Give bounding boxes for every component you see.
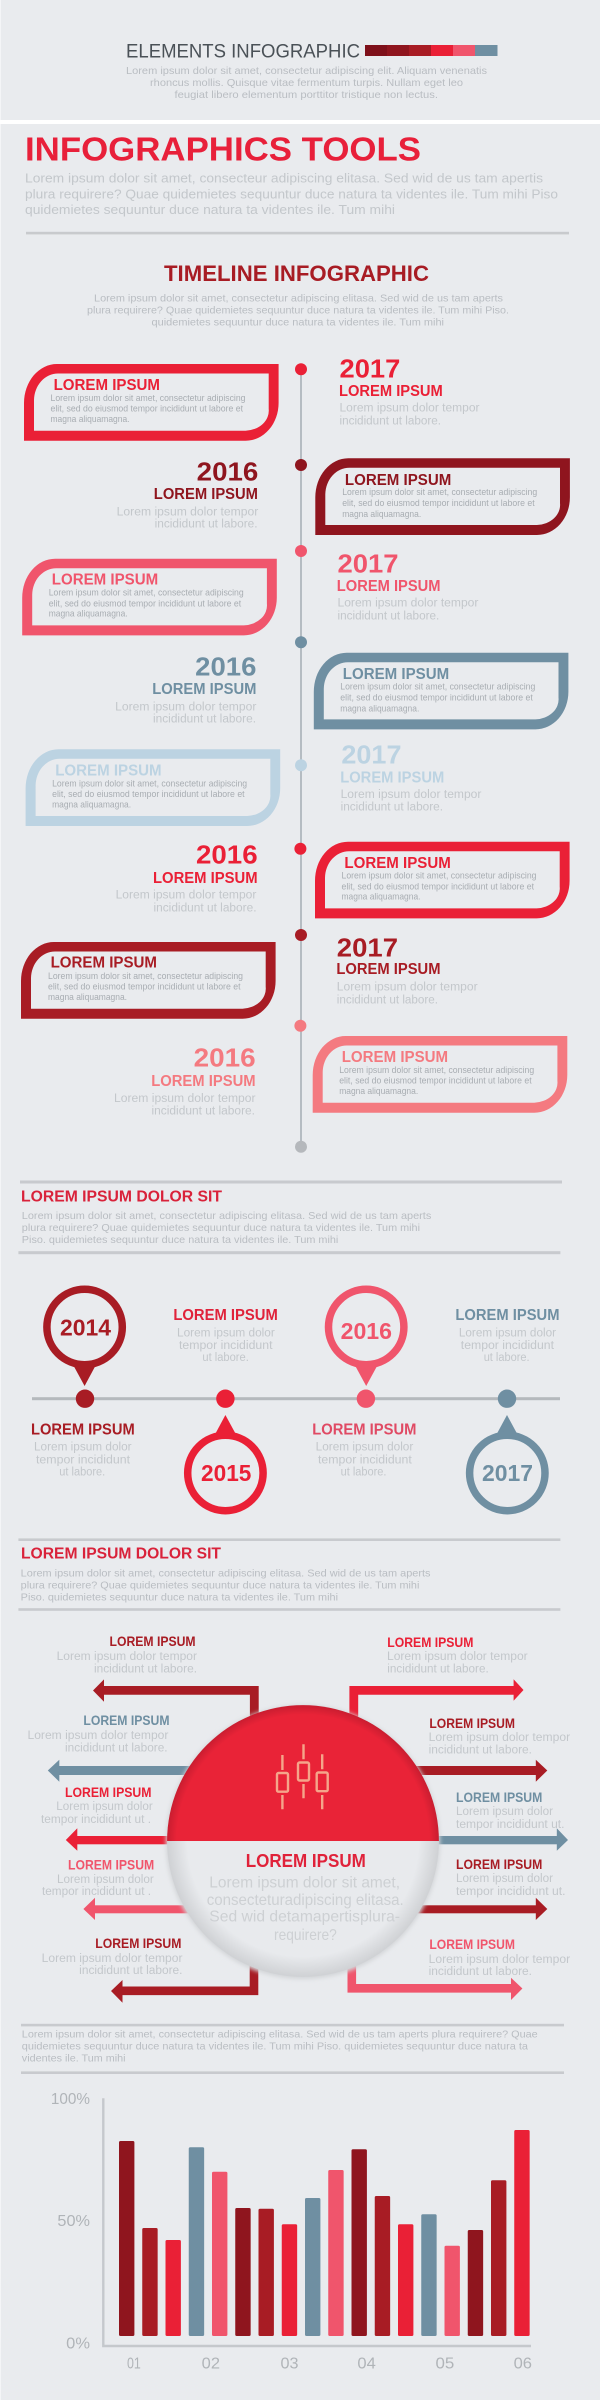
main title: INFOGRAPHICS TOOLS (25, 132, 421, 169)
pin label top middle (173, 1307, 278, 1364)
main paragraph: Lorem ipsum dolor sit amet, consecteur adipiscing elitasa. Sed wid de us tam apertis (25, 171, 544, 186)
timeline year 2017 b: LOREM IPSUM (337, 578, 440, 595)
timeline year 2017 b: Lorem ipsum dolor tempor (338, 598, 479, 610)
timeline card 8 (313, 1036, 567, 1113)
timeline card 8: magna aliquamagna. (339, 1086, 418, 1097)
pin label top right: LOREM IPSUM (455, 1307, 560, 1324)
timeline card 1: elit, sed do eiusmod tempor incididunt ut labore et (50, 404, 243, 415)
timeline year 2016 c: 2016 (196, 842, 258, 870)
radial label right 5: incididunt ut labore. (429, 1966, 532, 1978)
pin 2015: 2015 (201, 1460, 252, 1486)
centre text: requirere? (274, 1927, 337, 1944)
timeline card 8: LOREM IPSUM (342, 1049, 448, 1066)
pin 2017: 2017 (482, 1460, 533, 1486)
timeline year 2016 b: 2016 (195, 654, 256, 682)
centre text (207, 1851, 404, 1944)
timeline year 2017 d: incididunt ut labore. (337, 994, 438, 1006)
pin 2014 (47, 1289, 122, 1386)
radial label left 5 (42, 1935, 183, 1977)
centre text: Lorem ipsum dolor sit amet, (209, 1874, 400, 1891)
pin label top middle: Lorem ipsum dolor (177, 1328, 275, 1340)
chart intro text: videntes ile. Tum mihi (22, 2053, 125, 2065)
arrow top left (93, 1679, 254, 1722)
radial label right 2: incididunt ut labore. (429, 1745, 532, 1757)
pin label bottom left (31, 1421, 135, 1479)
timeline card 1: LOREM IPSUM (54, 377, 160, 394)
x axis labels: 05 (436, 2355, 454, 2372)
header: elements infographic (126, 40, 498, 101)
timeline card 2 (315, 458, 570, 535)
y axis labels: 50% (57, 2213, 90, 2230)
timeline card 3: magna aliquamagna. (49, 609, 128, 620)
pin label top right: ut labore. (484, 1352, 530, 1364)
x axis labels: 01 (127, 2355, 141, 2372)
timeline intro paragraph: plura requirere? Quae quidemietes sequuntur duce natura ta videntes ile. Tum mihi Piso. (87, 305, 509, 317)
radial centre circle (166, 1705, 440, 1979)
x axis labels: 02 (202, 2355, 220, 2372)
y axis labels (51, 2091, 90, 2352)
x axis labels: 03 (280, 2355, 299, 2372)
section heading: radial diagram: plura requirere? Quae quidemietes sequuntur duce natura ta videntes ile. Tum mihi (21, 1580, 419, 1592)
arrow right 4 (412, 1898, 547, 1920)
radial label right 2: LOREM IPSUM (429, 1715, 515, 1731)
pin label bottom left: ut labore. (59, 1467, 105, 1479)
radial label left 4: LOREM IPSUM (68, 1856, 154, 1872)
header title: ELEMENTS INFOGRAPHIC (126, 40, 360, 62)
timeline year 2017 c: 2017 (341, 742, 402, 770)
header paragraph: feugiat libero elementum porttitor tristique non lectus. (174, 89, 438, 101)
main paragraph: plura requirere? Quae quidemietes sequuntur duce natura ta videntes ile. Tum mihi Piso (25, 187, 558, 202)
timeline year 2016 d: Lorem ipsum dolor tempor (114, 1093, 256, 1105)
pin label bottom left: LOREM IPSUM (31, 1421, 135, 1438)
timeline card 5: elit, sed do eiusmod tempor incididunt ut labore et (52, 789, 245, 800)
arrow right 3 (436, 1828, 568, 1851)
timeline card 3: Lorem ipsum dolor sit amet, consectetur adipiscing (49, 588, 244, 599)
timeline card 7 (21, 942, 276, 1019)
chart intro text: quidemietes sequuntur duce natura ta videntes ile. Tum mihi Piso. quidemietes sequuntur duce natura ta (22, 2040, 528, 2052)
radial label right 4: Lorem ipsum dolor (456, 1873, 553, 1885)
timeline card 5: Lorem ipsum dolor sit amet, consectetur adipiscing (52, 778, 247, 789)
timeline year 2017 c: incididunt ut labore. (341, 802, 443, 814)
timeline year 2016 c: Lorem ipsum dolor tempor (116, 890, 257, 902)
timeline year 2016 d: 2016 (194, 1045, 256, 1073)
radial label left 2: incididunt ut labore. (65, 1743, 168, 1755)
timeline year 2017 b: incididunt ut labore. (338, 610, 439, 622)
timeline title: TIMELINE INFOGRAPHIC (164, 261, 429, 286)
chart axes (103, 2098, 531, 2346)
timeline year 2016 b (115, 654, 257, 726)
timeline year 2016 d (114, 1045, 256, 1118)
radial label right 1: incididunt ut labore. (387, 1664, 489, 1676)
timeline year 2016 a: LOREM IPSUM (154, 486, 258, 503)
timeline card 5: LOREM IPSUM (55, 762, 162, 779)
radial label left 2: LOREM IPSUM (83, 1712, 170, 1728)
pin 2015 (188, 1415, 263, 1511)
timeline card 7: Lorem ipsum dolor sit amet, consectetur adipiscing (48, 971, 243, 982)
timeline card 7: elit, sed do eiusmod tempor incididunt ut labore et (48, 982, 241, 993)
timeline card 3 (22, 559, 277, 635)
timeline card 2: LOREM IPSUM (345, 472, 451, 489)
timeline card 6: magna aliquamagna. (342, 892, 420, 903)
timeline year 2017 c: LOREM IPSUM (340, 769, 444, 786)
icon: candlestick sliders (277, 1744, 328, 1809)
radial label right 4: LOREM IPSUM (456, 1856, 542, 1872)
radial label left 1: incididunt ut labore. (94, 1664, 197, 1676)
radial label left 5: Lorem ipsum dolor tempor (42, 1953, 183, 1965)
timeline year 2016 b: Lorem ipsum dolor tempor (115, 702, 257, 714)
arrow left 2 (48, 1760, 193, 1782)
timeline year 2016 c: LOREM IPSUM (153, 870, 258, 887)
centre text: consecteturadipiscing elitasa. (207, 1892, 404, 1909)
timeline card 4: Lorem ipsum dolor sit amet, consectetur adipiscing (340, 682, 535, 693)
pin label bottom left: tempor incididunt (36, 1455, 131, 1467)
x axis labels (127, 2355, 532, 2372)
radial label right 1: LOREM IPSUM (387, 1634, 473, 1650)
timeline year 2016 b: LOREM IPSUM (152, 681, 256, 698)
radial label right 3 (456, 1789, 564, 1831)
header paragraph (126, 65, 487, 101)
section heading: radial diagram: Piso. quidemietes sequuntur duce natura ta videntes ile. Tum mihi (21, 1592, 338, 1604)
pin label top right: tempor incididunt (461, 1340, 555, 1352)
arrow bottom left (111, 1960, 254, 2003)
main title block (25, 132, 558, 217)
pin label top right (455, 1307, 560, 1364)
radial label right 3: LOREM IPSUM (456, 1789, 542, 1805)
radial label right 5 (429, 1936, 570, 1978)
radial label right 1 (387, 1634, 528, 1676)
radial label right 3: Lorem ipsum dolor (456, 1806, 553, 1818)
timeline year 2016 b: incididunt ut labore. (153, 714, 256, 726)
radial label left 4 (42, 1856, 154, 1898)
timeline year 2017 d (336, 935, 478, 1006)
radial label right 5: LOREM IPSUM (429, 1936, 515, 1952)
radial label left 1: Lorem ipsum dolor tempor (57, 1651, 197, 1663)
timeline card 4: LOREM IPSUM (343, 666, 449, 683)
timeline card 8: elit, sed do eiusmod tempor incididunt ut labore et (339, 1076, 532, 1087)
timeline intro paragraph (87, 293, 509, 329)
arrow right 2 (412, 1760, 547, 1782)
timeline intro paragraph: Lorem ipsum dolor sit amet, consectetur adipiscing elitasa. Sed wid de us tam aperts (94, 293, 503, 305)
radial label left 3: LOREM IPSUM (65, 1784, 152, 1800)
radial label left 2 (28, 1712, 170, 1755)
arrow left 3 (66, 1828, 171, 1851)
pin label bottom middle: ut labore. (341, 1467, 386, 1479)
timeline year 2017 a: Lorem ipsum dolor tempor (340, 403, 480, 415)
chart intro text: Lorem ipsum dolor sit amet, consectetur adipiscing elitasa. Sed wid de us tam aperts plura requirere? Quae (22, 2029, 538, 2041)
timeline year 2016 d: incididunt ut labore. (152, 1106, 255, 1118)
pin label bottom middle: LOREM IPSUM (312, 1421, 416, 1438)
section heading: pin timeline: plura requirere? Quae quidemietes sequuntur duce natura ta videntes ile. Tum mihi (22, 1222, 420, 1234)
pin label bottom left: Lorem ipsum dolor (34, 1442, 132, 1454)
radial label left 3 (41, 1784, 153, 1826)
bars (119, 2130, 530, 2336)
radial label left 2: Lorem ipsum dolor tempor (28, 1730, 169, 1742)
red upper half (167, 1705, 439, 1841)
timeline year 2017 d: 2017 (337, 935, 398, 963)
timeline card 4: magna aliquamagna. (340, 704, 419, 715)
timeline year 2017 d: LOREM IPSUM (336, 961, 440, 978)
timeline year 2016 a (117, 459, 258, 531)
grey lower half (167, 1841, 439, 1977)
timeline card 2: Lorem ipsum dolor sit amet, consectetur adipiscing (342, 487, 537, 498)
radial label right 2 (429, 1715, 570, 1757)
timeline card 1 (24, 364, 279, 441)
timeline card 6: Lorem ipsum dolor sit amet, consectetur adipiscing (342, 871, 536, 882)
pin label bottom middle: tempor incididunt (318, 1455, 413, 1467)
radial label left 3: tempor incididunt ut . (41, 1814, 151, 1826)
radial label right 4: tempor incididunt ut. (456, 1886, 566, 1898)
x axis labels: 04 (357, 2355, 376, 2372)
y axis labels: 0% (66, 2335, 90, 2352)
timeline year 2017 a: LOREM IPSUM (339, 383, 443, 400)
bar chart (51, 2091, 532, 2372)
timeline year 2017 b (337, 550, 479, 622)
radial label left 5: incididunt ut labore. (79, 1965, 182, 1977)
pin label top right: Lorem ipsum dolor (459, 1328, 556, 1340)
timeline year 2016 a: Lorem ipsum dolor tempor (117, 507, 258, 519)
radial label left 4: Lorem ipsum dolor (57, 1874, 154, 1886)
pin 2014: 2014 (60, 1314, 111, 1340)
timeline card 2: elit, sed do eiusmod tempor incididunt ut labore et (342, 498, 535, 509)
arrow left 4 (83, 1898, 194, 1920)
arrow top right (354, 1679, 524, 1722)
pin label top middle: ut labore. (202, 1352, 249, 1364)
radial label left 5: LOREM IPSUM (95, 1935, 181, 1951)
timeline card 4: elit, sed do eiusmod tempor incididunt ut labore et (340, 693, 533, 704)
timeline intro paragraph: quidemietes sequuntur duce natura ta videntes ile. Tum mihi (152, 317, 444, 329)
timeline year 2017 a (339, 356, 480, 427)
radial label right 2: Lorem ipsum dolor tempor (429, 1732, 570, 1744)
timeline year 2017 d: Lorem ipsum dolor tempor (337, 982, 478, 994)
timeline year 2017 a: 2017 (340, 356, 400, 384)
radial label left 3: Lorem ipsum dolor (56, 1801, 153, 1813)
timeline card 5: magna aliquamagna. (52, 799, 131, 810)
pin label top middle: tempor incididunt (179, 1340, 273, 1352)
section heading: radial diagram: LOREM IPSUM DOLOR SIT (21, 1546, 222, 1563)
section heading: pin timeline: Piso. quidemietes sequuntur duce natura ta videntes ile. Tum mihi (22, 1234, 338, 1246)
pin 2016 (328, 1289, 404, 1386)
section heading: radial diagram (18, 1538, 560, 1611)
y axis labels: 100% (51, 2091, 90, 2108)
section heading: pin timeline: Lorem ipsum dolor sit amet, consectetur adipiscing elitasa. Sed wid de us tam aperts (22, 1210, 431, 1222)
radial label left 4: tempor incididunt ut . (42, 1886, 151, 1898)
arrow bottom right (352, 1960, 522, 2000)
timeline card 2: magna aliquamagna. (342, 509, 421, 520)
centre text: LOREM IPSUM (246, 1851, 366, 1871)
timeline year 2016 c (116, 842, 258, 914)
timeline card 4 (314, 653, 568, 729)
timeline card 8: Lorem ipsum dolor sit amet, consectetur adipiscing (339, 1065, 534, 1076)
colour swatch bar (365, 45, 498, 56)
pin label top middle: LOREM IPSUM (173, 1307, 278, 1324)
timeline card 1: magna aliquamagna. (50, 414, 130, 425)
timeline axis with dots (294, 363, 307, 1153)
main paragraph (25, 171, 558, 217)
timeline year 2016 c: incididunt ut labore. (154, 902, 256, 914)
timeline card 6 (315, 842, 570, 918)
pin timeline line and dots (32, 1390, 560, 1408)
timeline heading (87, 261, 509, 329)
centre text: Sed wid detamapertisplura- (209, 1909, 400, 1926)
radial label left 1: LOREM IPSUM (110, 1633, 196, 1649)
timeline card 3: elit, sed do eiusmod tempor incididunt ut labore et (49, 598, 242, 609)
timeline year 2017 c (340, 742, 482, 814)
header paragraph: Lorem ipsum dolor sit amet, consectetur adipiscing elit. Aliquam venenatis (126, 65, 487, 77)
timeline card 5 (26, 749, 280, 826)
timeline card 6: LOREM IPSUM (344, 855, 451, 872)
timeline card 7: magna aliquamagna. (48, 992, 127, 1003)
pin label bottom middle: Lorem ipsum dolor (316, 1442, 413, 1454)
timeline card 3: LOREM IPSUM (52, 572, 158, 589)
main paragraph: quidemietes sequuntur duce natura ta videntes ile. Tum mihi (25, 202, 395, 217)
radial label right 5: Lorem ipsum dolor tempor (429, 1954, 570, 1966)
timeline year 2016 a: incididunt ut labore. (155, 519, 258, 531)
timeline year 2016 a: 2016 (197, 459, 258, 487)
section heading: pin timeline (18, 1180, 562, 1254)
radial label right 3: tempor incididunt ut. (456, 1819, 564, 1831)
pin 2017 (470, 1415, 545, 1511)
section heading: radial diagram: Lorem ipsum dolor sit amet, consectetur adipiscing elitasa. Sed wid de us tam aperts (21, 1568, 430, 1580)
chart intro text (21, 2024, 564, 2074)
radial label right 4 (456, 1856, 566, 1898)
timeline year 2016 d: LOREM IPSUM (151, 1073, 256, 1090)
radial label left 1 (57, 1633, 197, 1676)
timeline year 2017 a: incididunt ut labore. (340, 415, 441, 427)
x axis labels: 06 (514, 2355, 532, 2372)
timeline year 2017 c: Lorem ipsum dolor tempor (341, 789, 482, 801)
pin label bottom middle (312, 1421, 416, 1479)
timeline year 2017 b: 2017 (338, 550, 398, 578)
timeline card 1: Lorem ipsum dolor sit amet, consectetur adipiscing (50, 393, 246, 404)
timeline card 6: elit, sed do eiusmod tempor incididunt ut labore et (342, 881, 534, 892)
timeline card 7: LOREM IPSUM (51, 954, 157, 972)
radial label right 1: Lorem ipsum dolor tempor (387, 1651, 528, 1663)
pin 2016: 2016 (341, 1318, 392, 1344)
header paragraph: rhoncus mollis. Quisque vitae fermentum turpis. Nullam eget leo (150, 77, 463, 89)
section heading: pin timeline: LOREM IPSUM DOLOR SIT (21, 1188, 223, 1205)
